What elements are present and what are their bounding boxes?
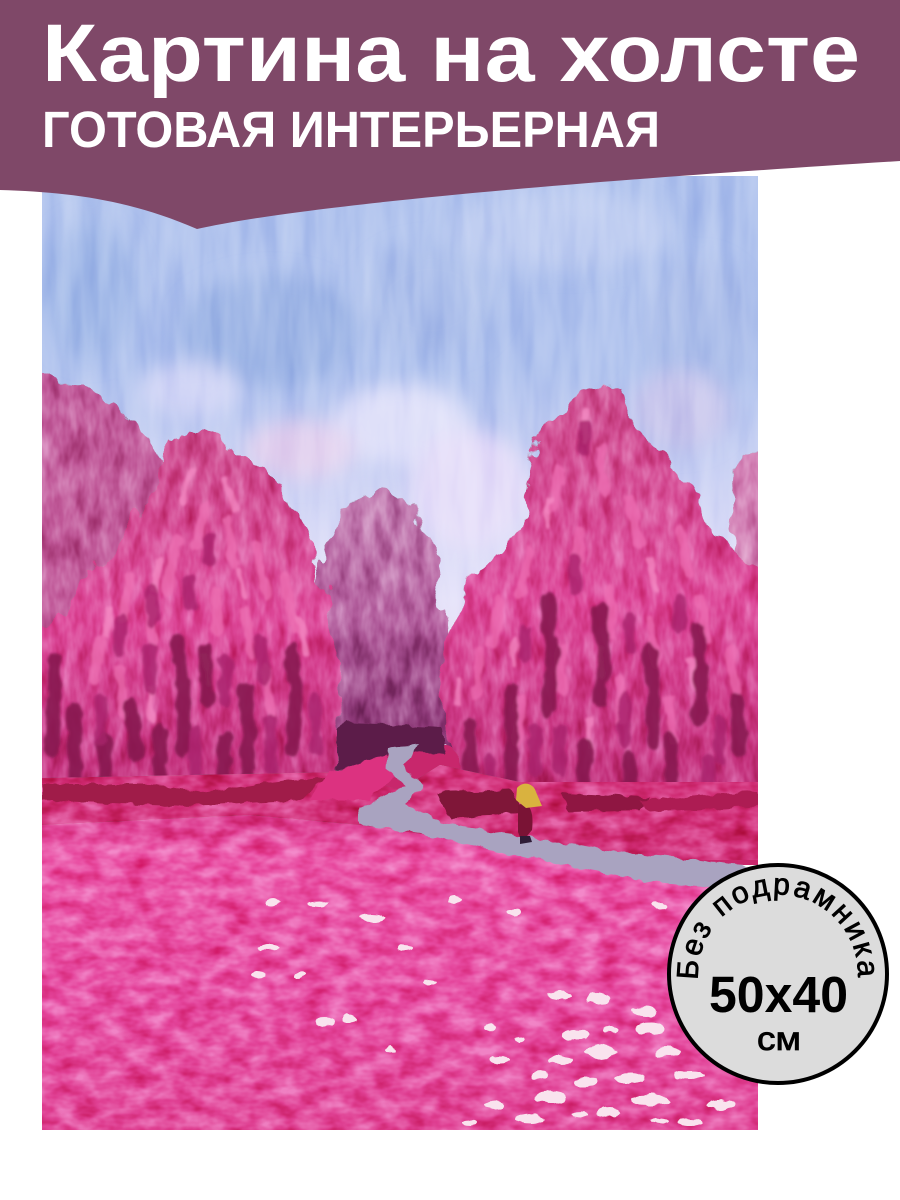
white petals on meadow: [251, 897, 745, 1126]
badge curved text: Без подрамника: [676, 878, 874, 978]
right pale tree edge: [728, 451, 758, 567]
background tree center: [322, 490, 452, 745]
painting sky: [42, 176, 758, 745]
subtitle: ГОТОВАЯ ИНТЕРЬЕРНАЯ: [42, 101, 660, 158]
small figure on the path: [516, 784, 542, 844]
title: Картина на холсте: [42, 8, 860, 99]
dark gap behind trees: [334, 720, 446, 771]
right main tree: [442, 390, 770, 812]
badge circle: [669, 865, 887, 1083]
left tree shadows and highlights: [53, 470, 317, 790]
right tree shadows and highlights: [458, 410, 740, 801]
ground base under scene: [385, 745, 758, 865]
badge unit: см: [757, 1020, 801, 1057]
top banner: [0, 0, 900, 229]
badge size: 50x40: [709, 966, 848, 1023]
ground band under trees: [42, 765, 758, 860]
pink meadow: [42, 815, 758, 1130]
size badge: [667, 863, 889, 1085]
winding grey path: [358, 745, 758, 892]
background tree left: [42, 372, 164, 628]
painting: pink park landscape: [30, 176, 770, 1130]
dark tree shadows on ground: [42, 755, 758, 818]
left main tree: [42, 429, 342, 778]
